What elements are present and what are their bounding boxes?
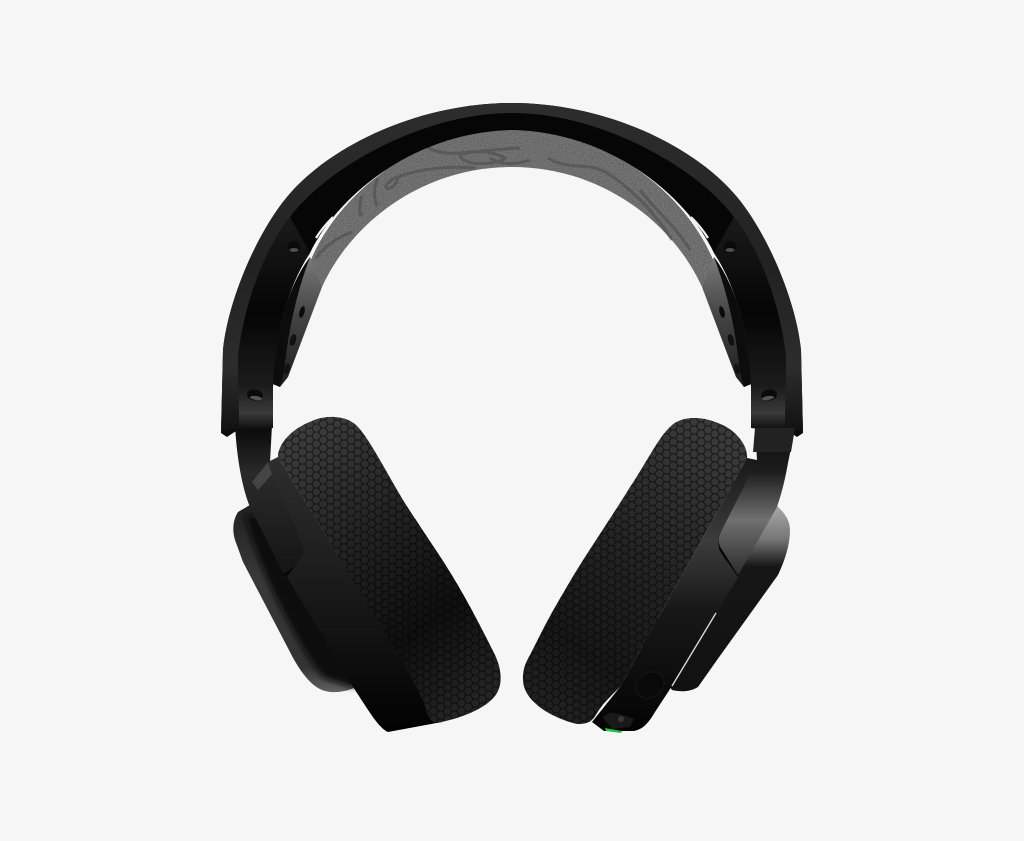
left ear cup bbox=[268, 417, 501, 732]
outer strip highlight bbox=[221, 103, 803, 433]
yoke bbox=[716, 428, 795, 577]
arm face bbox=[221, 217, 310, 437]
right slider arm bbox=[702, 217, 803, 437]
left slider arm bbox=[221, 217, 322, 437]
back shell: right ear cup bbox=[640, 505, 790, 691]
light slit left bbox=[316, 217, 333, 238]
headband arch bbox=[221, 103, 803, 433]
back shell: left ear cup bbox=[233, 505, 380, 692]
yoke seam bbox=[270, 462, 307, 575]
right ear cup bbox=[523, 418, 795, 733]
cushion bbox=[523, 418, 747, 724]
headband fabric pad bbox=[310, 130, 714, 287]
cushion rim plate bbox=[592, 458, 757, 731]
yoke collar bbox=[753, 428, 795, 452]
arm rivets bbox=[288, 241, 300, 253]
mute switch bbox=[603, 713, 634, 729]
plate holes bbox=[298, 306, 306, 318]
fabric swirl pattern bbox=[316, 146, 690, 258]
light slit right bbox=[691, 217, 708, 238]
green status light bbox=[605, 728, 622, 733]
left yoke bbox=[235, 425, 307, 575]
slider plate bbox=[273, 257, 322, 387]
cushion bbox=[278, 417, 501, 723]
audio jack recess bbox=[631, 667, 669, 703]
rim edge highlight bbox=[672, 613, 716, 686]
cushion rim plate bbox=[268, 457, 442, 732]
yoke highlight bbox=[252, 462, 272, 490]
yoke seam bbox=[718, 460, 755, 576]
